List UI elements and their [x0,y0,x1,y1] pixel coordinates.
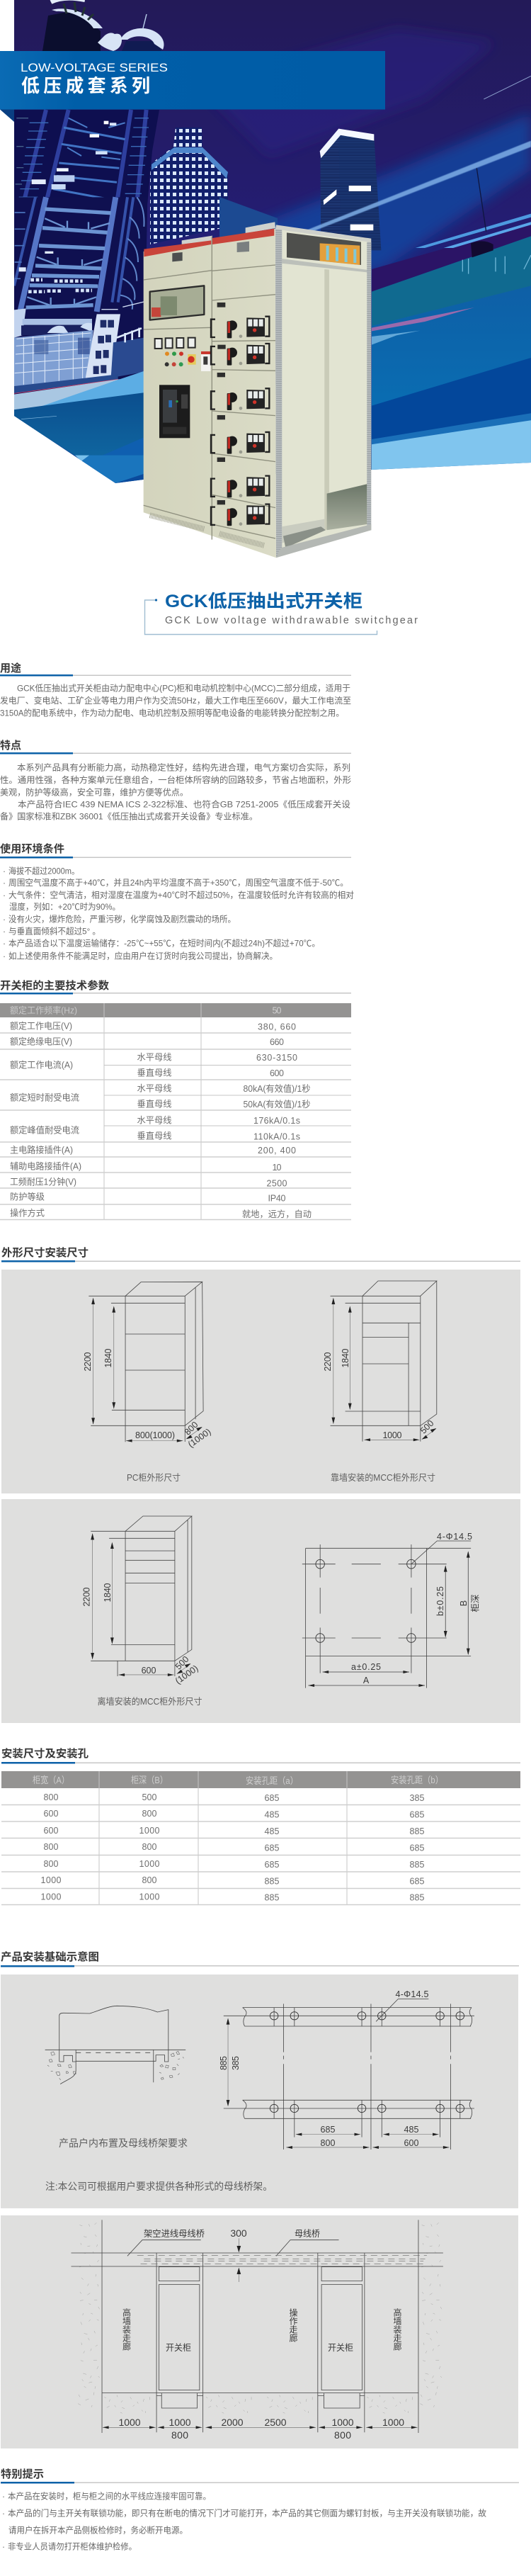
top panels seams [144,236,275,540]
section: mounting dimension table [1,1748,520,1904]
drawing: room plan: 300 [230,2227,247,2239]
product: switchgear cabinet [144,222,371,558]
drawing: room plan: 800 [334,2429,351,2441]
drawing: mounting hole plan: 柜深 [470,1594,480,1612]
bullet list: 大气条件：空气清洁，相对湿度在温度为+40℃时不超过50%，在温度较低时允许有较高的相对 [8,890,354,900]
table labels: 防护等级 [10,1192,45,1202]
drawing: mounting hole plan: B [459,1600,469,1606]
table values column: 110kA/0.1s [253,1132,300,1142]
caption: PC柜外形尺寸 [127,1473,181,1483]
paragraph [0,762,351,822]
drawing: mounting hole plan: b±0.25 [435,1586,445,1616]
section heading: installation foundation: 产品安装基础示意图 [1,1950,99,1963]
table rows: 885 [409,1893,425,1903]
product title [144,592,418,635]
red strips [144,240,211,256]
paragraph: 备》国家标准和ZBK 36001《低压抽出式成套开关设备》专业标准。 [0,810,258,822]
bullet list [2,2491,486,2552]
heading: 特别提示 [1,2468,44,2480]
paragraph: 美观，防护等级高，安全可靠，维护方便等优点。 [0,786,188,798]
inspection window [150,286,204,320]
table rows [41,1792,425,1903]
table rows: 500 [142,1792,157,1802]
table labels: 额定工作电压(V) [10,1020,72,1032]
drawing: PC cabinet: 2200 [83,1352,93,1372]
drawing: free-standing MCC cabinet: 500 [173,1654,191,1671]
heading: 用途 [0,662,21,674]
drawing: room plan: 高墙装走廊 [122,2307,132,2351]
table busbar column [137,1053,172,1141]
drawing: base rails with hole spacing: 600 [404,2138,419,2148]
drawing: room plan: 高墙装走廊 [392,2307,402,2351]
drawing: room plan: 2500 [265,2417,287,2428]
heading: 开关柜的主要技术参数 [0,979,109,992]
table labels: 辅助电路接插件(A) [10,1160,81,1172]
bullet list: · [2,2491,5,2501]
band chinese title: 低压成套系列 [21,75,150,96]
push buttons [165,351,183,366]
band english title: LOW-VOLTAGE SERIES [21,61,168,74]
table values column: 660 [270,1037,284,1047]
building: right tower with lit windows [320,129,381,250]
drawing: base rails with hole spacing: 885 [219,2056,229,2070]
drawing: wall-mounted MCC cabinet [323,1281,437,1483]
drawing: mounting hole plan: 4-Φ14.5 [437,1532,472,1542]
drawing: PC cabinet [83,1282,213,1483]
drawing: room plan [71,2220,443,2441]
table labels: 工频耐压1分钟(V) [10,1176,76,1187]
table rows: 885 [409,1860,425,1870]
table grid [1,1788,520,1904]
bullet list: 本产品适合以下温度运输储存：-25℃~+55℃，在短时间内(不超过24h)不超过+70℃。 [8,938,320,948]
warning plate [201,351,210,371]
caption: indoor layout: 产品户内布置及母线桥架要求 [59,2137,188,2149]
table values column: 80kA(有效值)/1秒 [244,1083,310,1094]
drawing: free-standing MCC cabinet: (1000) [173,1663,200,1686]
table rows: 885 [265,1893,280,1903]
table rows: 1000 [41,1892,62,1902]
table rows: 885 [265,1876,280,1886]
drawing: room plan: 操作走廊 [288,2307,298,2343]
drawing: base rails with hole spacing: 4-Φ14.5 [395,1989,429,1999]
table rows: 685 [265,1860,280,1870]
drawing: base rails with hole spacing: 485 [404,2125,419,2135]
table rows: 485 [265,1809,280,1819]
bullet list: 如上述使用条件不能满足时，应由用户在订货时向我公司提出，协商解决。 [8,951,278,961]
panel: free-standing MCC and mounting holes [1,1499,520,1723]
drawing: wall-mounted MCC cabinet: 2200 [323,1352,333,1372]
bullet list: · [2,2508,5,2518]
table rows: 800 [44,1792,59,1802]
table rows: 685 [409,1809,425,1819]
drawing: free-standing MCC cabinet: 600 [142,1666,156,1676]
bullet list: · [3,951,6,961]
drawing: indoor layout cross-section [45,2006,185,2084]
drawing: room plan: 开关柜 [328,2343,353,2353]
drawing: room plan: 1000 [382,2417,404,2428]
table rows: 685 [409,1876,425,1886]
table rows: 1000 [139,1859,160,1869]
table header [1,1771,520,1788]
building: left skyscraper upper floors [14,110,159,205]
drawing: base rails with hole spacing [219,1989,474,2150]
paragraph: 3150A的配电系统中，作为动力配电、电动机控制及照明等配电设备的电能转换分配控制之用。 [0,707,344,718]
emergency stop [188,354,196,365]
table busbar column: 垂直母线 [137,1100,172,1109]
drawing: room plan: 800 [171,2429,188,2441]
bullet list: 请用户在拆开本产品侧板检修时，务必断开电源。 [8,2525,188,2535]
bullet list: 海拔不超过2000m。 [8,866,79,876]
drawing: mounting hole plan: A [363,1676,370,1685]
hero photo: night city [14,0,531,489]
product english name: GCK Low voltage withdrawable switchgear [165,615,418,626]
bullet list: 非专业人员请勿打开柜体维护检修。 [8,2541,137,2552]
blue title band [0,51,385,122]
table busbar column: 垂直母线 [137,1131,172,1141]
drawing: free-standing MCC cabinet: 1840 [103,1583,113,1603]
drawing: base rails with hole spacing: 800 [320,2138,336,2148]
bullet list: 周围空气温度不高于+40℃，并且24h内平均温度不高于+350℃，周围空气温度不低于-50℃。 [8,877,348,888]
table rows: 600 [44,1826,59,1836]
bullet list: · [3,927,6,937]
section: special notes [1,2468,519,2552]
paragraph: 性。通用性强，各种方案单元任意组合，一台柜体所容纳的回路较多，节省占地面积，外形 [0,774,351,785]
drawing: room plan: 架空进线母线桥 [144,2229,205,2239]
top grills [182,236,212,244]
table header: 柜宽（A） [33,1775,69,1785]
table header: 额定工作频率(Hz) [10,1005,77,1016]
drawing: free-standing MCC cabinet [82,1516,202,1707]
table header [0,1003,351,1017]
table values column: IP40 [268,1193,286,1203]
paragraph: 发电厂、变电站、工矿企业等电力用户作为交流50Hz，最大工作电压至660V，最大工作电流至 [0,695,351,706]
table labels: 操作方式 [10,1207,45,1219]
paragraph: 本产品符合IEC 439 NEMA ICS 2-322标准、也符合GB 7251-2005《低压成套开关设 [18,799,350,809]
table rows: 1000 [139,1892,160,1902]
building: left skyscraper lower floors and podium [14,197,147,395]
table values column: 380, 660 [258,1022,296,1032]
meters [155,338,195,349]
table grid [0,1017,351,1220]
panel: PC and wall-mounted MCC outline [1,1270,520,1493]
table rows: 800 [44,1842,59,1852]
table busbar column: 水平母线 [137,1115,172,1125]
drawing: mounting hole plan [302,1532,480,1688]
table busbar column: 垂直母线 [137,1068,172,1078]
table header: 柜深（B） [131,1775,168,1785]
sky glow [222,27,531,275]
table rows: 800 [142,1809,157,1819]
heading: 安装尺寸及安装孔 [1,1748,88,1760]
table rows: 800 [142,1875,157,1885]
air circuit breaker [159,385,190,438]
drawing: free-standing MCC cabinet: 2200 [82,1587,92,1607]
bullet list: 本产品在安装时，柜与柜之间的水平线应连接牢固可靠。 [8,2491,211,2501]
vent slots [150,515,264,546]
drawing: PC cabinet: 800(1000) [135,1430,175,1440]
table rows: 600 [44,1809,59,1819]
table busbar column: 水平母线 [137,1053,172,1063]
paragraph: GCK低压抽出式开关柜由动力配电中心(PC)柜和电动机控制中心(MCC)二部分组成，适用于 [17,683,350,693]
building: central tower [150,128,278,244]
cabinet side [275,225,371,558]
drawing: room plan: 1000 [119,2417,141,2428]
drawing: base rails with hole spacing: 385 [231,2056,241,2070]
table values column: 600 [270,1068,284,1078]
caption: 靠墙安装的MCC柜外形尺寸 [331,1472,435,1483]
bullet list: · [3,866,6,876]
table rows: 885 [409,1826,425,1836]
drawing: PC cabinet: 1840 [103,1348,113,1367]
product chinese name: GCK低压抽出式开关柜 [165,592,362,611]
drawing: wall-mounted MCC cabinet: 1000 [382,1430,402,1440]
bullet list: · [2,2542,5,2552]
bullet list: · [3,878,6,888]
table values column: 200, 400 [258,1146,296,1156]
bullet list: 没有火灾，爆炸危险，严重污秽，化学腐蚀及剧烈震动的场所。 [8,914,236,924]
bullet list: 湿度，列如：+20℃时为90%。 [9,901,120,912]
drawing: PC cabinet: (1000) [186,1427,213,1450]
section: environmental conditions [0,842,354,961]
table busbar column: 水平母线 [137,1084,172,1094]
table labels: 额定短时耐受电流 [10,1092,79,1102]
section: usage [0,662,351,718]
handles top [172,252,183,261]
bullet list: · [3,938,6,948]
ground at left [14,371,145,483]
drawing: room plan: 2000 [221,2417,244,2428]
table header: 50 [272,1006,282,1016]
table header: 安装孔距（a） [246,1775,298,1786]
table values column: 就地，远方，自动 [242,1209,312,1219]
cabinet front [144,229,276,558]
table values column: 2500 [266,1179,287,1189]
section heading: outline dimensions: 外形尺寸安装尺寸 [1,1246,88,1259]
heading: 使用环境条件 [0,842,64,855]
drawing: mounting hole plan: a±0.25 [351,1662,381,1672]
drawer units [211,303,269,526]
table labels [10,1020,81,1219]
table rows: 1000 [139,1826,160,1836]
ground and road at right [372,224,531,470]
bullet list [3,866,354,961]
light trails [304,76,531,248]
drawing: wall-mounted MCC cabinet: 500 [418,1418,436,1435]
table header: 安装孔距（b） [391,1775,443,1785]
section: technical parameters table [0,979,351,1220]
table values column: 630-3150 [256,1053,297,1063]
note: 注:本公司可根据用户要求提供各种形式的母线桥架。 [45,2181,273,2192]
title bracket [144,600,377,635]
table labels: 主电路接插件(A) [10,1145,73,1155]
paragraph: 本系列产品具有分断能力高，动热稳定性好，结构先进合理，电气方案切合实际，系列 [17,762,350,772]
table rows: 800 [44,1859,59,1869]
heading: 特点 [0,739,21,752]
table rows: 685 [409,1843,425,1853]
drawing: PC cabinet: 800 [183,1420,200,1437]
drawing: room plan: 1000 [169,2417,191,2428]
bullet list: 与垂直面倾斜不超过5° 。 [8,925,101,937]
bullet list: · [3,914,6,924]
drawing: room plan: 母线桥 [295,2229,320,2239]
rooftops at the top [42,0,164,51]
table labels: 额定工作电流(A) [10,1060,73,1070]
table labels: 额定峰值耐受电流 [10,1125,79,1135]
table rows: 685 [265,1793,280,1803]
panel: foundation drawings [1,1975,518,2208]
drawing: base rails with hole spacing: 685 [320,2125,336,2135]
caption: 离墙安装的MCC柜外形尺寸 [98,1696,202,1707]
drawing: room plan: 1000 [331,2417,354,2428]
table rows: 685 [265,1843,280,1853]
drawing: room plan: 开关柜 [166,2343,191,2353]
table values column: 50kA(有效值)/1秒 [244,1099,310,1109]
bullet list: · [3,890,6,900]
table values column: 10 [272,1163,282,1173]
drawing: wall-mounted MCC cabinet: 1840 [341,1348,350,1367]
table values column [242,1022,312,1219]
bullet list: 本产品的门与主开关有联锁功能，即只有在断电的情况下门才可能打开，本产品的其它侧面为螺钉封板，与主开关没有联锁功能，故 [8,2508,486,2518]
table rows: 800 [142,1842,157,1852]
table labels: 额定绝缘电压(V) [10,1036,72,1047]
table rows: 485 [265,1826,280,1836]
table rows: 1000 [41,1875,62,1885]
paragraph [0,683,351,718]
table values column: 176kA/0.1s [253,1116,300,1126]
panel: switchgear room plan [1,2215,518,2448]
section: features [0,739,351,822]
table rows: 385 [409,1793,425,1803]
